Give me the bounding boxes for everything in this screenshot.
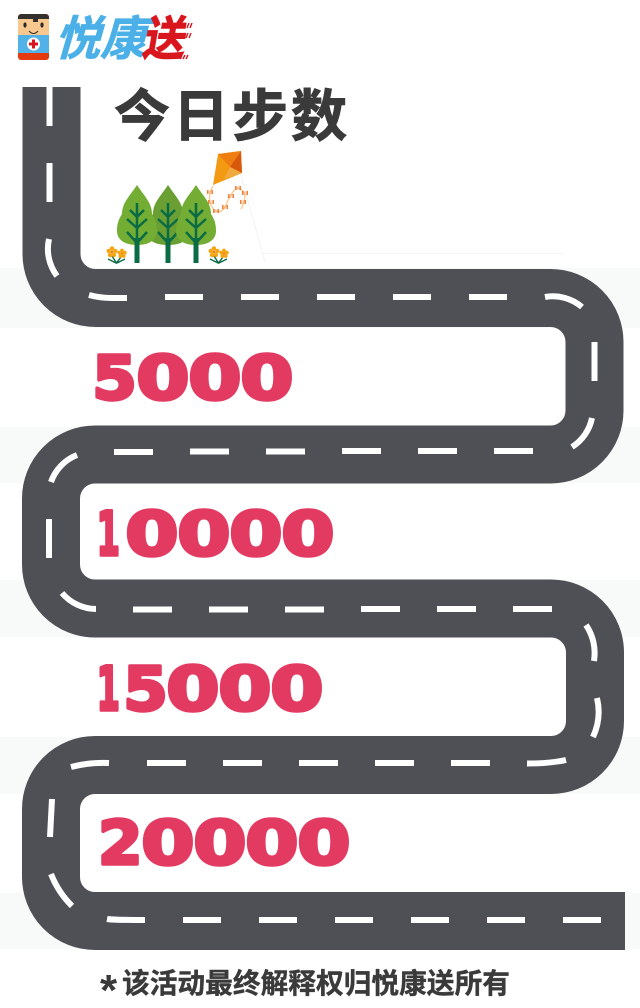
logo — [18, 13, 192, 66]
number: 15000: 5 — [123, 653, 168, 725]
footer note — [100, 966, 510, 1008]
flowers: left — [106, 246, 127, 263]
flowers: right — [208, 246, 229, 263]
number: 15000: 000 — [166, 654, 323, 725]
tree: left — [117, 185, 157, 263]
number: 5000: 5 — [92, 342, 137, 414]
road — [48, 87, 625, 921]
icon: doctor face — [18, 14, 49, 60]
logo wordmark: 悦康 — [51, 14, 158, 66]
number: 15000 — [97, 653, 323, 725]
road centre dashes — [48, 87, 601, 920]
number: 10000: 0000 — [125, 499, 334, 570]
logo wordmark: 送 — [140, 13, 191, 66]
number: 5000: 000 — [136, 343, 293, 414]
title: 今日步数 — [114, 85, 347, 148]
kite — [207, 151, 265, 262]
footer note: 该活动最终解释权归悦康送所有 — [122, 968, 510, 999]
number: 10000: 1 — [97, 498, 120, 570]
trees — [117, 185, 216, 263]
tree: middle — [146, 185, 190, 263]
tree: right — [176, 185, 216, 263]
number: 20000: 2 — [98, 807, 143, 879]
number: 20000: 0000 — [141, 808, 350, 879]
number: 15000: 1 — [97, 653, 120, 725]
